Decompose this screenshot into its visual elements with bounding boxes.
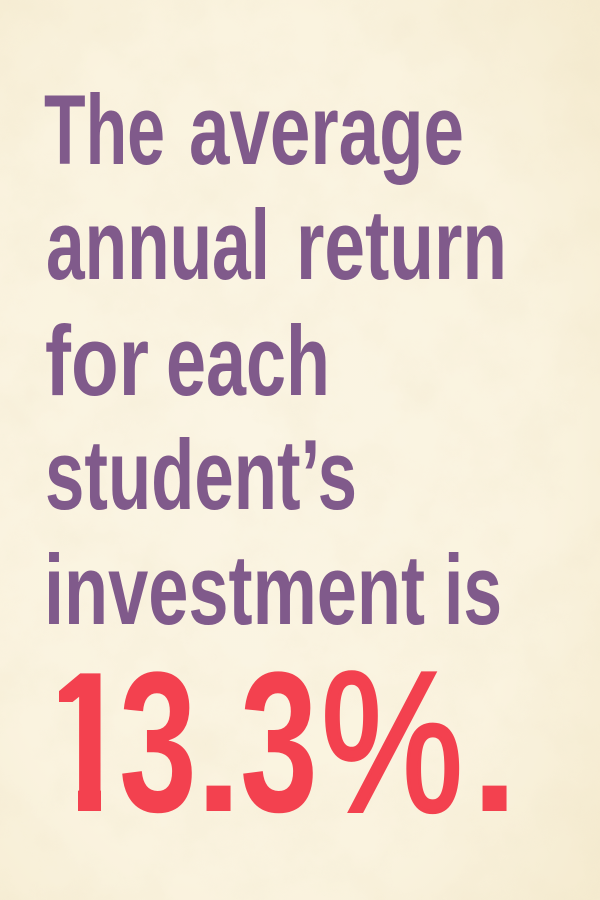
headline text: The xyxy=(44,74,165,185)
key figure: 13.3% xyxy=(59,670,507,814)
headline text: investment xyxy=(44,534,425,645)
headline text: for xyxy=(45,305,149,416)
headline text: is xyxy=(444,534,502,645)
key figure: 13.3%: . xyxy=(471,658,518,848)
headline text: each xyxy=(166,305,330,416)
key figure: 13.3%: % xyxy=(321,631,463,854)
key figure: 13.3%: 1 xyxy=(43,631,129,854)
headline text: return xyxy=(296,189,507,300)
key figure: 13.3%: 3 xyxy=(240,630,318,854)
headline text: student’s xyxy=(45,419,357,530)
key figure: 13.3%: 3 xyxy=(119,630,197,854)
key figure: 13.3%: . xyxy=(195,658,242,848)
headline text xyxy=(44,74,507,645)
headline text: annual xyxy=(46,189,270,300)
headline text: average xyxy=(189,74,464,185)
